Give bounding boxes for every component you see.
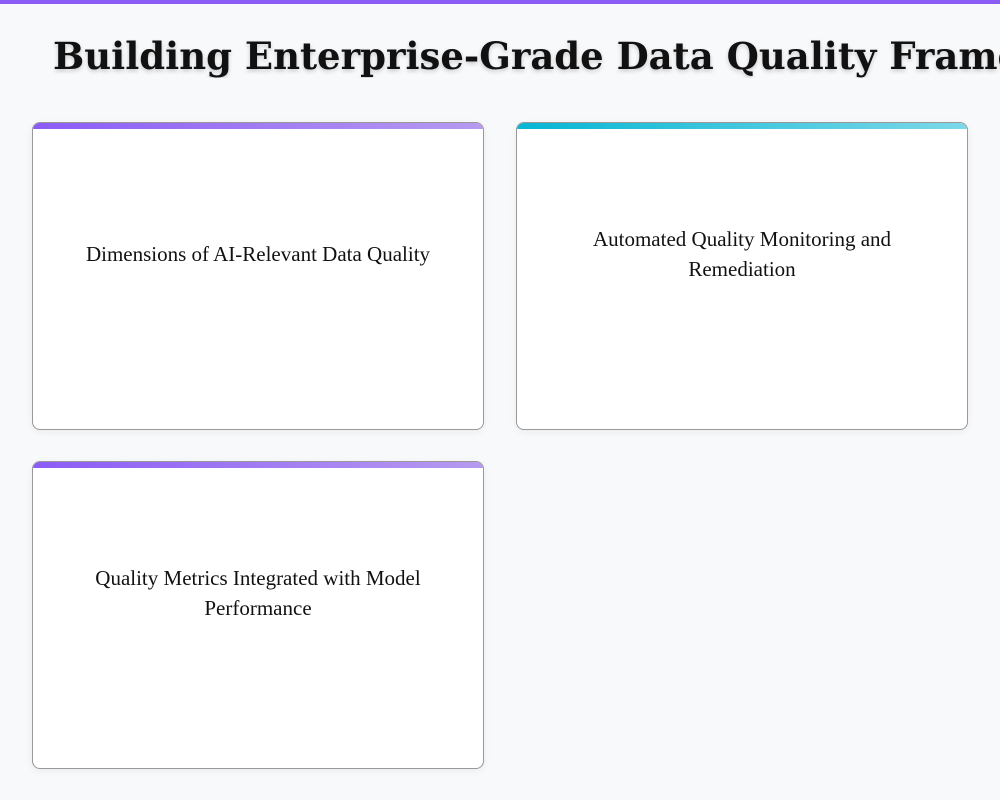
panel text: monitoring: Automated Quality Monitoring and Remediation [593, 227, 891, 281]
panel: dimensions [32, 122, 484, 430]
panel: metrics [32, 461, 484, 769]
panel text: dimensions: Dimensions of AI-Relevant Data Quality [86, 242, 430, 266]
panel: monitoring [516, 122, 968, 430]
panel text: metrics: Quality Metrics Integrated with Model Performance [95, 566, 421, 620]
